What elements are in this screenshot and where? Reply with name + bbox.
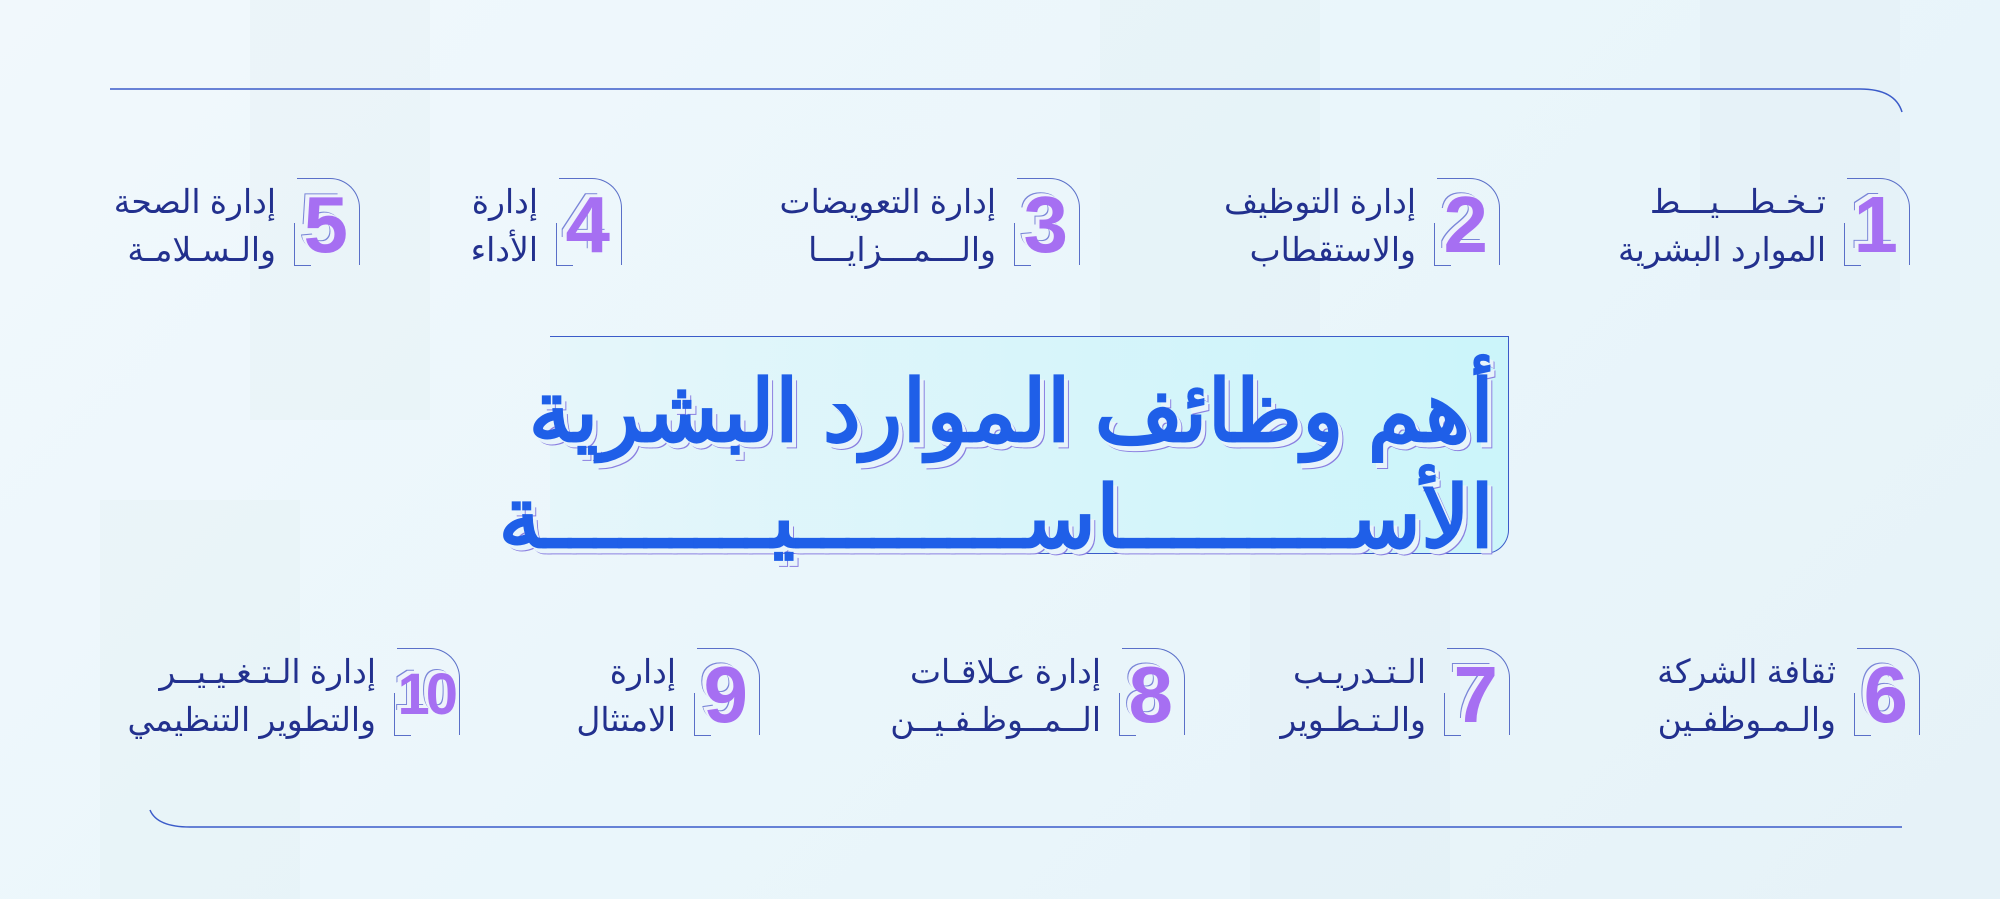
- text 10: [127, 653, 376, 739]
- item 1: [1618, 178, 1910, 269]
- item 3: [780, 178, 1080, 269]
- text 1: تـخـطـــيـــط: [1650, 183, 1826, 220]
- item 10: [127, 648, 460, 739]
- item 7: [1279, 648, 1510, 739]
- item 6: [1657, 648, 1920, 739]
- text 7: والـتـطـوير: [1280, 701, 1426, 738]
- text 8: [890, 653, 1101, 739]
- number 8: 8: [1128, 650, 1173, 739]
- text 4: إدارة: [472, 183, 538, 220]
- number 8: [1119, 648, 1185, 739]
- text 7: الـتـدريـب: [1293, 653, 1426, 690]
- number 4: [556, 178, 622, 269]
- number 1: 1: [1854, 180, 1898, 269]
- title box: [550, 336, 1509, 554]
- number 6: [1854, 648, 1920, 739]
- title text: [498, 354, 1496, 567]
- number 2: [1434, 178, 1500, 269]
- text 6: والـمـوظفـين: [1658, 701, 1836, 738]
- number 2: 2: [1444, 180, 1488, 269]
- text 9: إدارة: [610, 653, 676, 690]
- item 8: [890, 648, 1185, 739]
- number 6: 6: [1864, 650, 1908, 739]
- item 2: [1224, 178, 1500, 269]
- number 5: [294, 178, 360, 269]
- text 10: والتطوير التنظيمي: [127, 701, 376, 738]
- item 9: [576, 648, 760, 739]
- number 9: 9: [704, 650, 748, 739]
- title text: الأســـــــــاســـــــــيـــــــــة: [498, 470, 1494, 566]
- text 3: والـــمـــزايـــا: [808, 231, 996, 268]
- text 8: الــمــوظـفـيــن: [890, 701, 1101, 738]
- text 3: [780, 183, 996, 269]
- number 3: [1014, 178, 1080, 269]
- text 8: إدارة عـلاقـات: [910, 653, 1101, 690]
- number 9: [694, 648, 760, 739]
- text 10: إدارة الـتـغـيـيــر: [159, 653, 376, 690]
- number 7: 7: [1454, 650, 1498, 739]
- number 7: [1444, 648, 1510, 739]
- text 1: الموارد البشرية: [1618, 231, 1826, 268]
- number 5: 5: [304, 180, 348, 269]
- number 10: [394, 648, 460, 736]
- text 5: [114, 183, 276, 269]
- text 5: إدارة الصحة: [114, 183, 276, 220]
- item 5: [114, 178, 360, 269]
- text 2: إدارة التوظيف: [1224, 183, 1416, 220]
- text 3: إدارة التعويضات: [780, 183, 996, 220]
- text 6: [1657, 653, 1836, 739]
- text 9: [576, 653, 676, 738]
- text 9: الامتثال: [576, 701, 676, 738]
- text 4: الأداء: [471, 231, 538, 268]
- text 2: [1224, 183, 1416, 269]
- number 4: 4: [566, 180, 610, 269]
- background shapes: [0, 0, 2000, 1]
- text 7: [1279, 653, 1426, 739]
- text 6: ثقافة الشركة: [1657, 653, 1836, 690]
- text 5: والـسـلامـة: [127, 231, 276, 268]
- text 2: والاستقطاب: [1250, 231, 1416, 268]
- title text: أهم وظائف الموارد البشرية: [528, 364, 1494, 460]
- number 10: 10: [397, 662, 454, 727]
- text 1: [1618, 183, 1826, 269]
- item 4: [471, 178, 622, 269]
- number 1: [1844, 178, 1910, 269]
- text 4: [471, 183, 538, 268]
- number 3: 3: [1024, 180, 1068, 269]
